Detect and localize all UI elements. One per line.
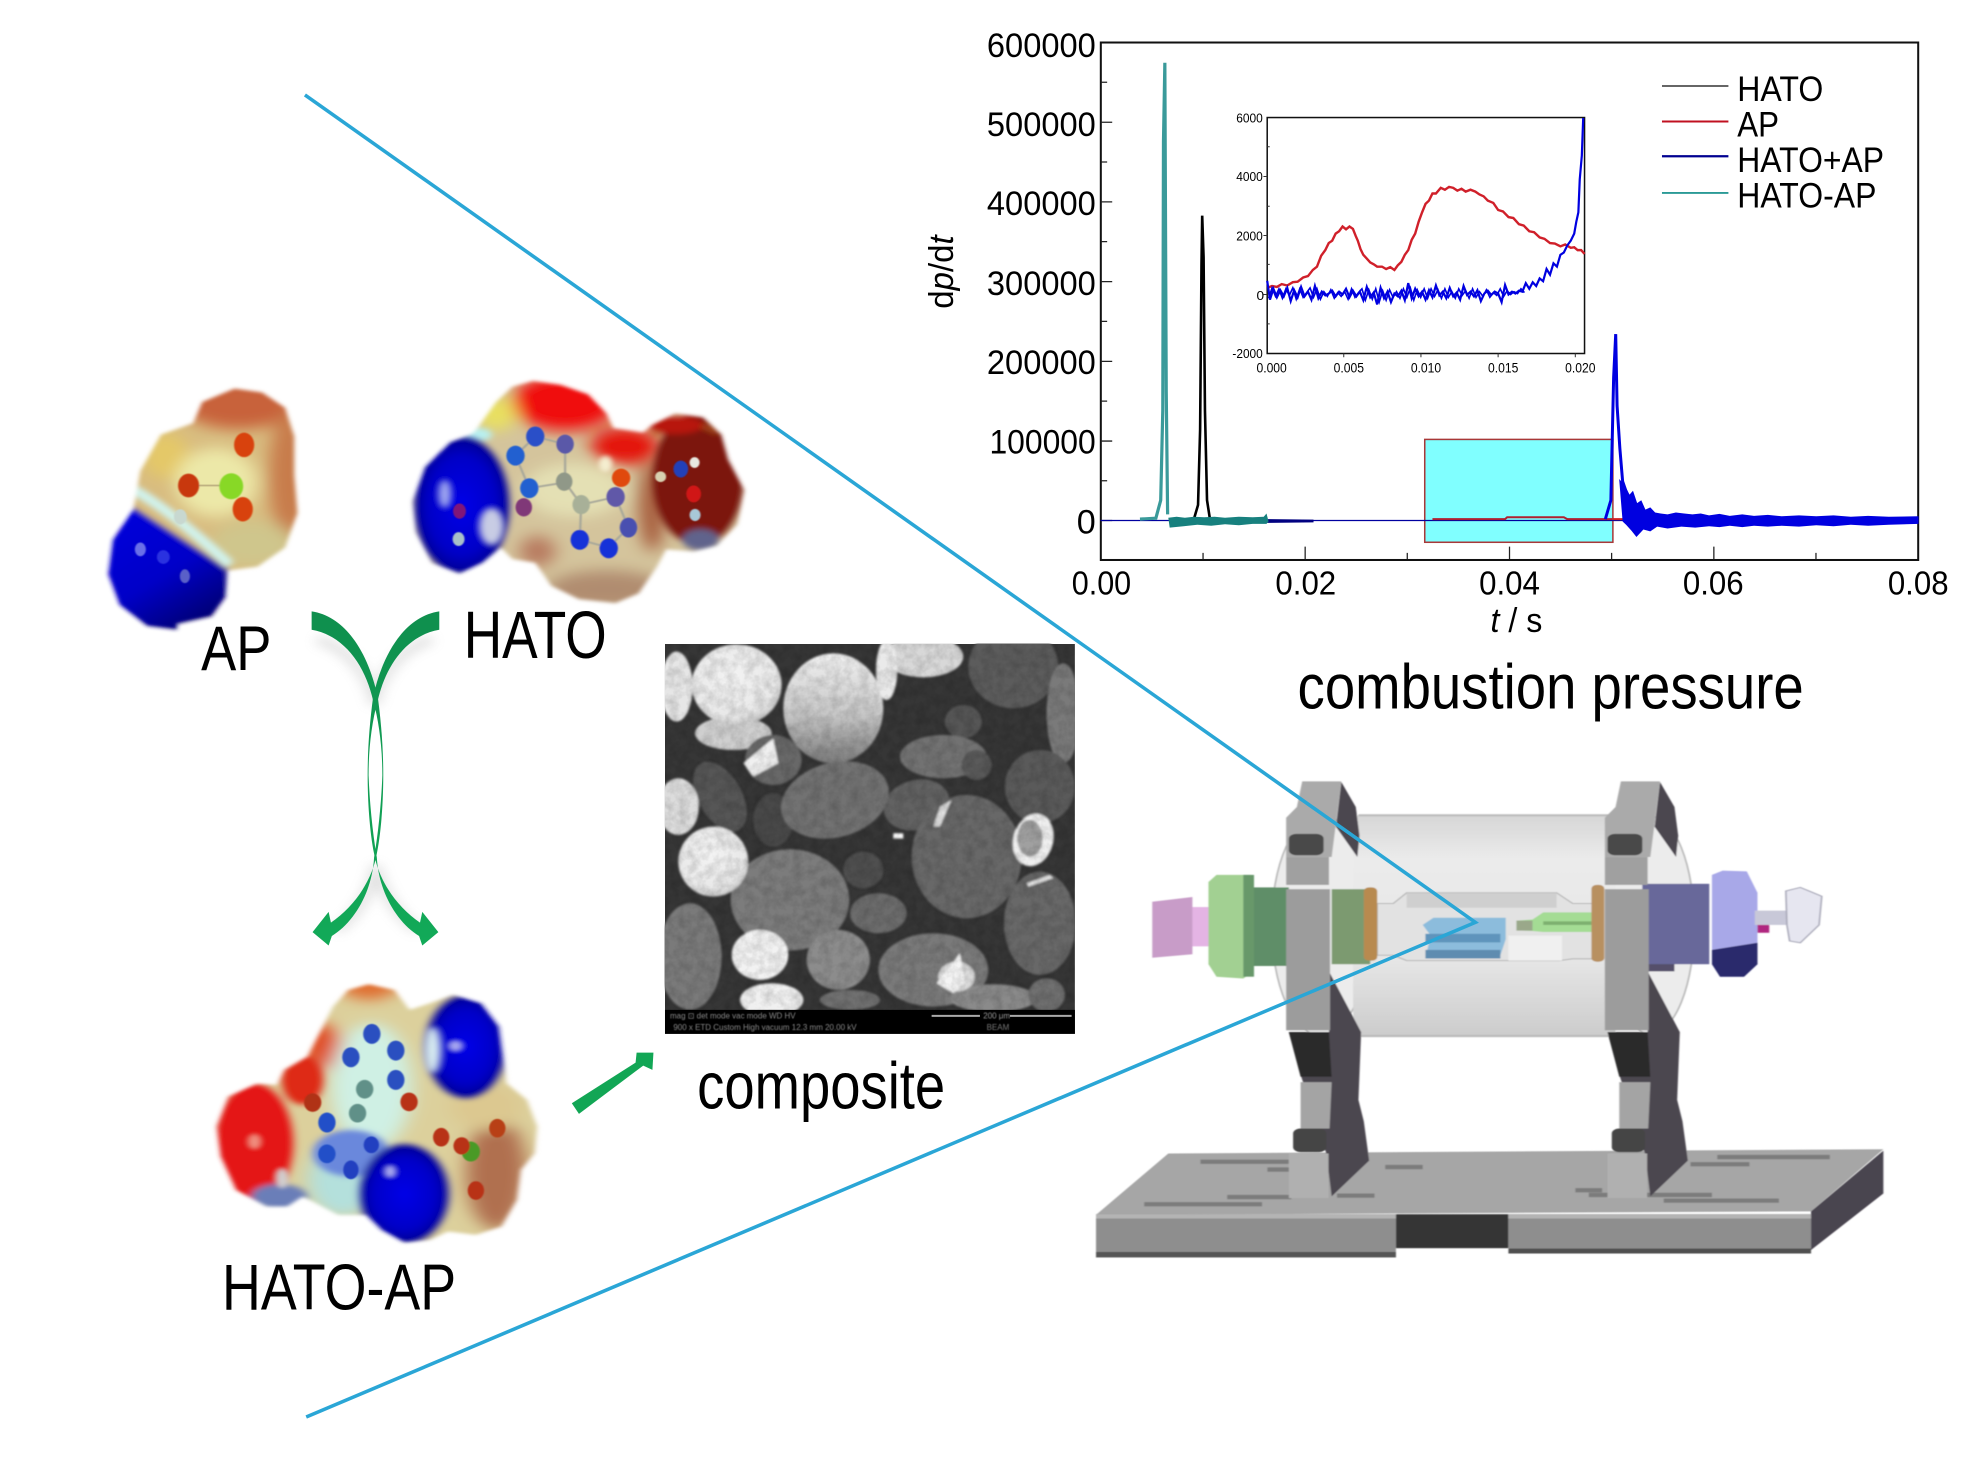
grey particles <box>658 625 1080 1012</box>
SEM data bar: mag ⊡ det mode vac mode WD HV <box>670 1012 796 1021</box>
SEM data bar <box>665 1010 1075 1034</box>
y axis labels <box>987 27 1096 541</box>
label: composite: composite <box>697 1048 945 1122</box>
x axis labels: 0.04 <box>1479 565 1540 602</box>
chart legend: HATO-AP <box>1737 175 1876 215</box>
label: HATO: HATO <box>464 598 607 673</box>
sample holder <box>1423 918 1506 958</box>
axis ticks <box>1101 82 1816 559</box>
molecule: HATO <box>404 373 753 609</box>
y axis labels: 600000 <box>987 27 1096 65</box>
y axis labels: 200000 <box>987 344 1096 382</box>
x axis labels: 0.06 <box>1683 565 1744 602</box>
x axis labels <box>1072 565 1949 602</box>
x axis labels: 0.02 <box>1275 565 1336 602</box>
inset y labels: -2000 <box>1232 346 1263 361</box>
y axis labels: 400000 <box>987 185 1096 223</box>
SEM data bar: 200 μm <box>983 1012 1010 1021</box>
inset y labels: 4000 <box>1236 169 1263 184</box>
stand rear edges <box>1289 782 1688 1196</box>
right threaded fitting <box>1591 871 1822 977</box>
arrow: to composite <box>572 1053 653 1114</box>
inset x labels <box>1256 360 1596 376</box>
y axis labels: 0 <box>1077 503 1096 541</box>
base plate <box>1096 1149 1883 1257</box>
label: HATO-AP: HATO-AP <box>222 1252 456 1324</box>
label: AP: AP <box>201 614 271 684</box>
inset x labels: 0.000 <box>1256 360 1287 376</box>
heading: combustion pressure: combustion pressure <box>1298 653 1804 723</box>
micrograph: SEM of composite <box>658 625 1080 1034</box>
chart: combustion pressure dp/dt versus time <box>923 27 1949 640</box>
x axis labels: 0.08 <box>1888 565 1949 602</box>
inset x labels: 0.015 <box>1488 360 1519 376</box>
right support stand <box>1605 781 1660 1198</box>
chart legend: HATO+AP <box>1737 140 1884 180</box>
arrows: AP and HATO combine to HATO-AP <box>312 611 439 946</box>
SEM data bar: BEAM <box>987 1023 1009 1032</box>
inset frame <box>1267 118 1585 354</box>
igniter <box>1516 912 1591 932</box>
highlighted zoom region <box>1425 439 1613 542</box>
left support stand <box>1286 781 1341 1198</box>
inner tube <box>1377 893 1594 961</box>
inset y labels <box>1232 111 1264 361</box>
molecule: AP <box>104 386 301 632</box>
inset chart <box>1232 111 1596 376</box>
SEM data bar: 900 x ETD Custom High vacuum 12.3 mm 20.00 kV <box>673 1023 857 1032</box>
apparatus: combustion chamber <box>1096 781 1883 1257</box>
x axis title: t / s <box>1491 602 1542 640</box>
chart legend: HATO <box>1737 69 1823 109</box>
x axis labels: 0.00 <box>1072 565 1131 602</box>
inset ticks <box>1263 147 1575 357</box>
y axis labels: 100000 <box>989 424 1096 462</box>
chart legend <box>1662 69 1884 215</box>
inset y labels: 2000 <box>1236 228 1263 243</box>
inset x labels: 0.005 <box>1334 360 1364 376</box>
y axis labels: 500000 <box>987 106 1096 144</box>
inset y labels: 6000 <box>1236 111 1263 126</box>
callout lines: zoom from apparatus sample to composite <box>305 95 1475 1417</box>
bright particles <box>658 636 1059 1017</box>
y axis labels: 300000 <box>987 265 1096 303</box>
main data traces <box>1101 63 1919 537</box>
y axis title: dp/dt <box>923 234 961 309</box>
chart plot frame <box>1101 43 1918 560</box>
inset x labels: 0.020 <box>1565 360 1596 376</box>
glass cylinder <box>1272 814 1694 1036</box>
chart legend: AP <box>1737 105 1779 145</box>
inset x labels: 0.010 <box>1411 360 1441 376</box>
inset y labels: 0 <box>1256 288 1264 303</box>
molecule: HATO-AP <box>212 982 540 1245</box>
left threaded fitting <box>1152 875 1377 978</box>
inset traces <box>1267 118 1585 304</box>
